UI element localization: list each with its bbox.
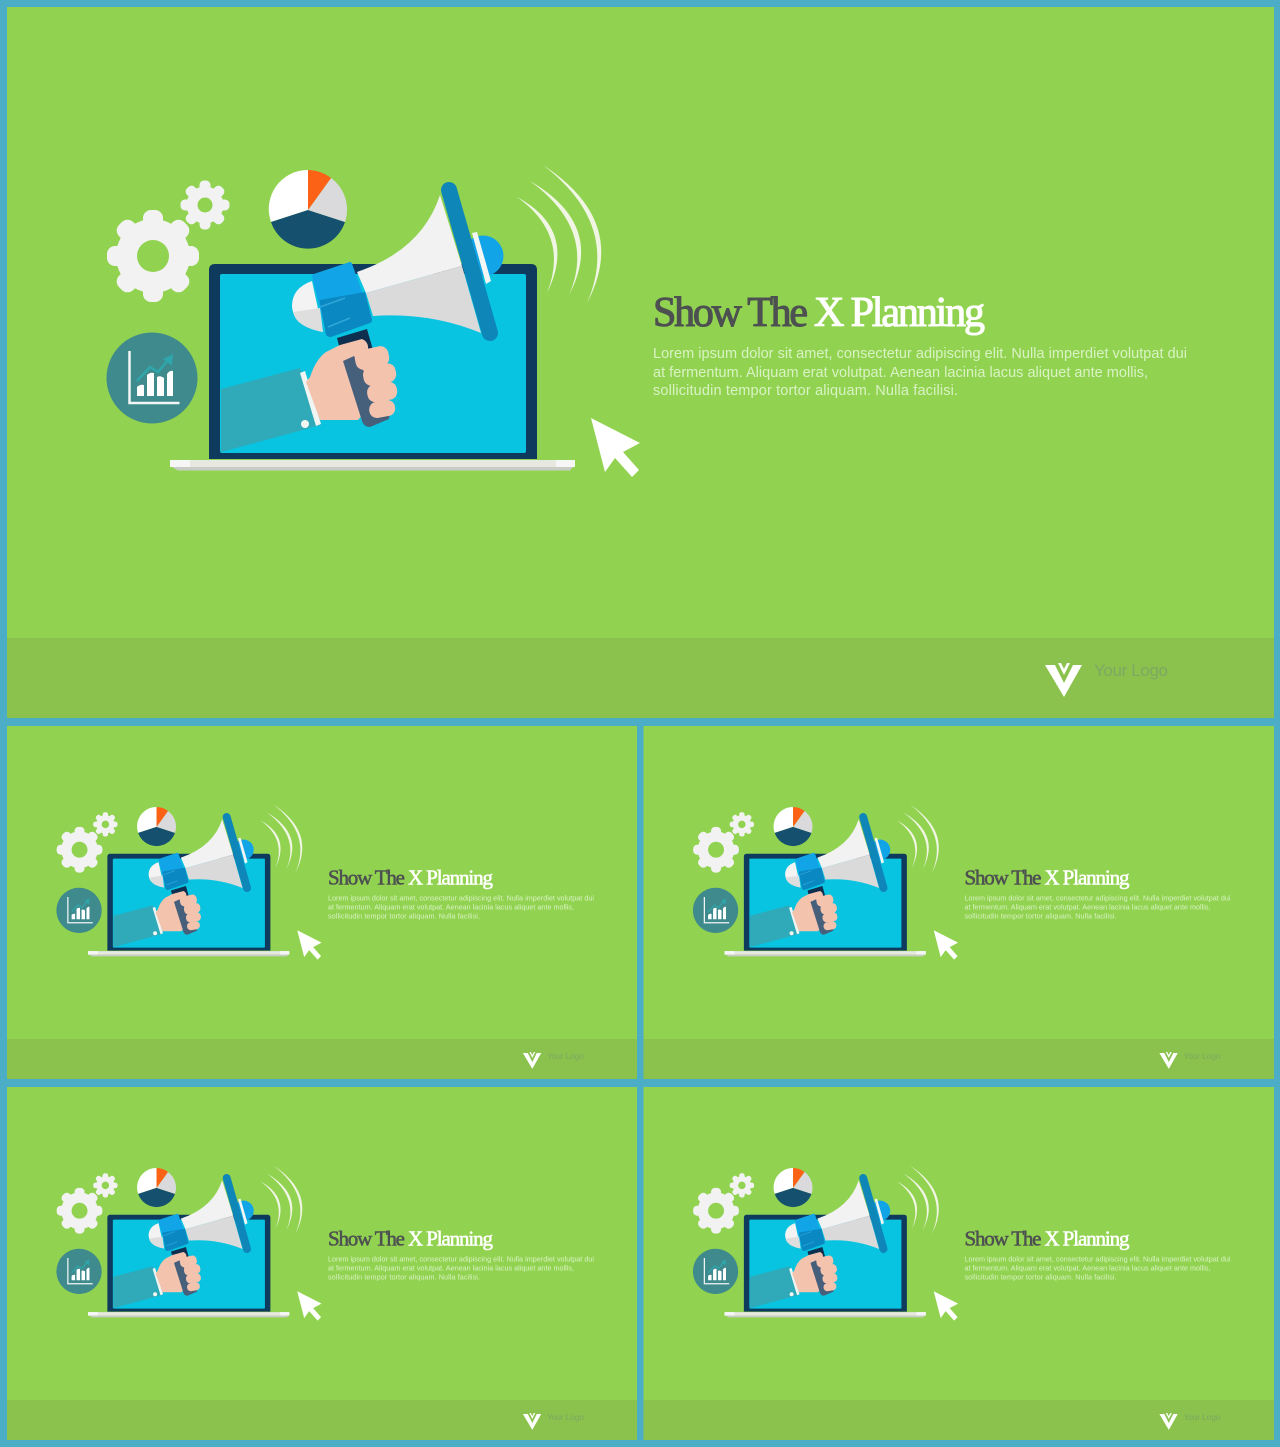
laptop [170,264,575,470]
icon: logo mark [523,1052,541,1069]
megaphone grip [343,356,390,427]
sound waves [517,165,601,303]
illustration [56,805,322,960]
body text: Lorem ipsum dolor sit amet, consectetur adipiscing elit. Nulla imperdiet volutpat dui [964,1254,1231,1264]
title [328,1226,494,1250]
illustration: laptop and megaphone [106,165,640,477]
slide background [644,1087,1274,1440]
megaphone handle [337,329,373,361]
title [964,866,1130,890]
body text [328,1254,594,1282]
title [964,1226,1130,1250]
logo text: Your Logo [1184,1051,1221,1061]
title white part: X Planning [814,290,985,336]
footer band [7,1039,637,1079]
body text: at fermentum. Aliquam erat volutpat. Aenean lacinia lacus aliquet ante mollis, [964,1264,1210,1272]
body text: sollicitudin tempor tortor aliquam. Nulla facilisi. [653,383,958,399]
body text: at fermentum. Aliquam erat volutpat. Aenean lacinia lacus aliquet ante mollis, [328,902,574,912]
body text: sollicitudin tempor tortor aliquam. Nulla facilisi. [964,912,1116,920]
panel: slide 5 [644,1087,1274,1440]
body text: sollicitudin tempor tortor aliquam. Nulla facilisi. [328,912,480,920]
icon: growth chart circle [106,332,198,424]
megaphone back cap [292,281,323,332]
logo [523,1412,584,1430]
logo text: Your Logo [547,1412,584,1422]
body text [653,346,1187,399]
icon: large gear [107,210,199,302]
body text: at fermentum. Aliquam erat volutpat. Aenean lacinia lacus aliquet ante mollis, [964,902,1210,912]
title dark part: Show The [653,290,808,336]
megaphone rim [449,190,490,333]
slide background [7,726,637,1079]
slide background [7,7,1274,718]
panel: slide 4 [7,1087,637,1440]
title: X Planning [1044,1226,1130,1250]
title: X Planning [408,866,494,890]
icon: logo mark [1045,663,1082,697]
footer band [644,1039,1274,1079]
footer band [7,638,1274,718]
body text: sollicitudin tempor tortor aliquam. Nulla facilisi. [964,1272,1116,1282]
logo text: Your Logo [547,1051,584,1061]
title [328,866,494,890]
panel: main slide [7,7,1274,718]
megaphone blue body [314,264,372,337]
sleeve [221,368,321,452]
icon: logo mark [1159,1413,1178,1430]
body text: Lorem ipsum dolor sit amet, consectetur adipiscing elit. Nulla imperdiet volutpat dui [328,1254,594,1264]
title: X Planning [408,1226,494,1250]
icon: cursor arrow [591,418,640,477]
icon: logo mark [523,1413,541,1430]
panel: slide 3 [644,726,1274,1079]
body text: Lorem ipsum dolor sit amet, consectetur adipiscing elit. Nulla imperdiet volutpat dui [653,346,1187,362]
illustration [693,805,958,960]
title: Show The [964,1226,1042,1250]
hand palm [306,339,376,420]
body text [328,894,594,920]
slide background [644,726,1274,1079]
logo text: Your Logo [1184,1412,1221,1422]
title: X Planning [1044,866,1130,890]
logo [1159,1051,1221,1069]
body text: Lorem ipsum dolor sit amet, consectetur adipiscing elit. Nulla imperdiet volutpat dui [328,894,594,902]
title: Show The [328,1226,405,1250]
slide background [7,1087,637,1440]
logo [1159,1412,1221,1430]
megaphone horn [357,195,481,333]
body text [964,894,1231,920]
logo [1045,661,1168,697]
illustration [693,1166,958,1321]
chart: pie icon [269,170,347,249]
logo [523,1051,584,1069]
body text: Lorem ipsum dolor sit amet, consectetur adipiscing elit. Nulla imperdiet volutpat dui [964,894,1231,902]
megaphone far dome [462,232,504,284]
body text: sollicitudin tempor tortor aliquam. Nulla facilisi. [328,1272,480,1282]
title: Show The [964,866,1042,890]
footer band [7,1400,637,1440]
body text [964,1254,1231,1282]
logo text: Your Logo [1094,661,1168,680]
title: Show The [328,866,405,890]
icon: logo mark [1159,1052,1178,1069]
footer band [644,1400,1274,1440]
body text: at fermentum. Aliquam erat volutpat. Aenean lacinia lacus aliquet ante mollis, [653,365,1148,381]
title [653,290,985,336]
illustration [56,1166,322,1321]
body text: at fermentum. Aliquam erat volutpat. Aenean lacinia lacus aliquet ante mollis, [328,1264,574,1272]
icon: small gear [180,180,230,230]
hand fingers [353,345,399,419]
panel: slide 2 [7,726,637,1079]
